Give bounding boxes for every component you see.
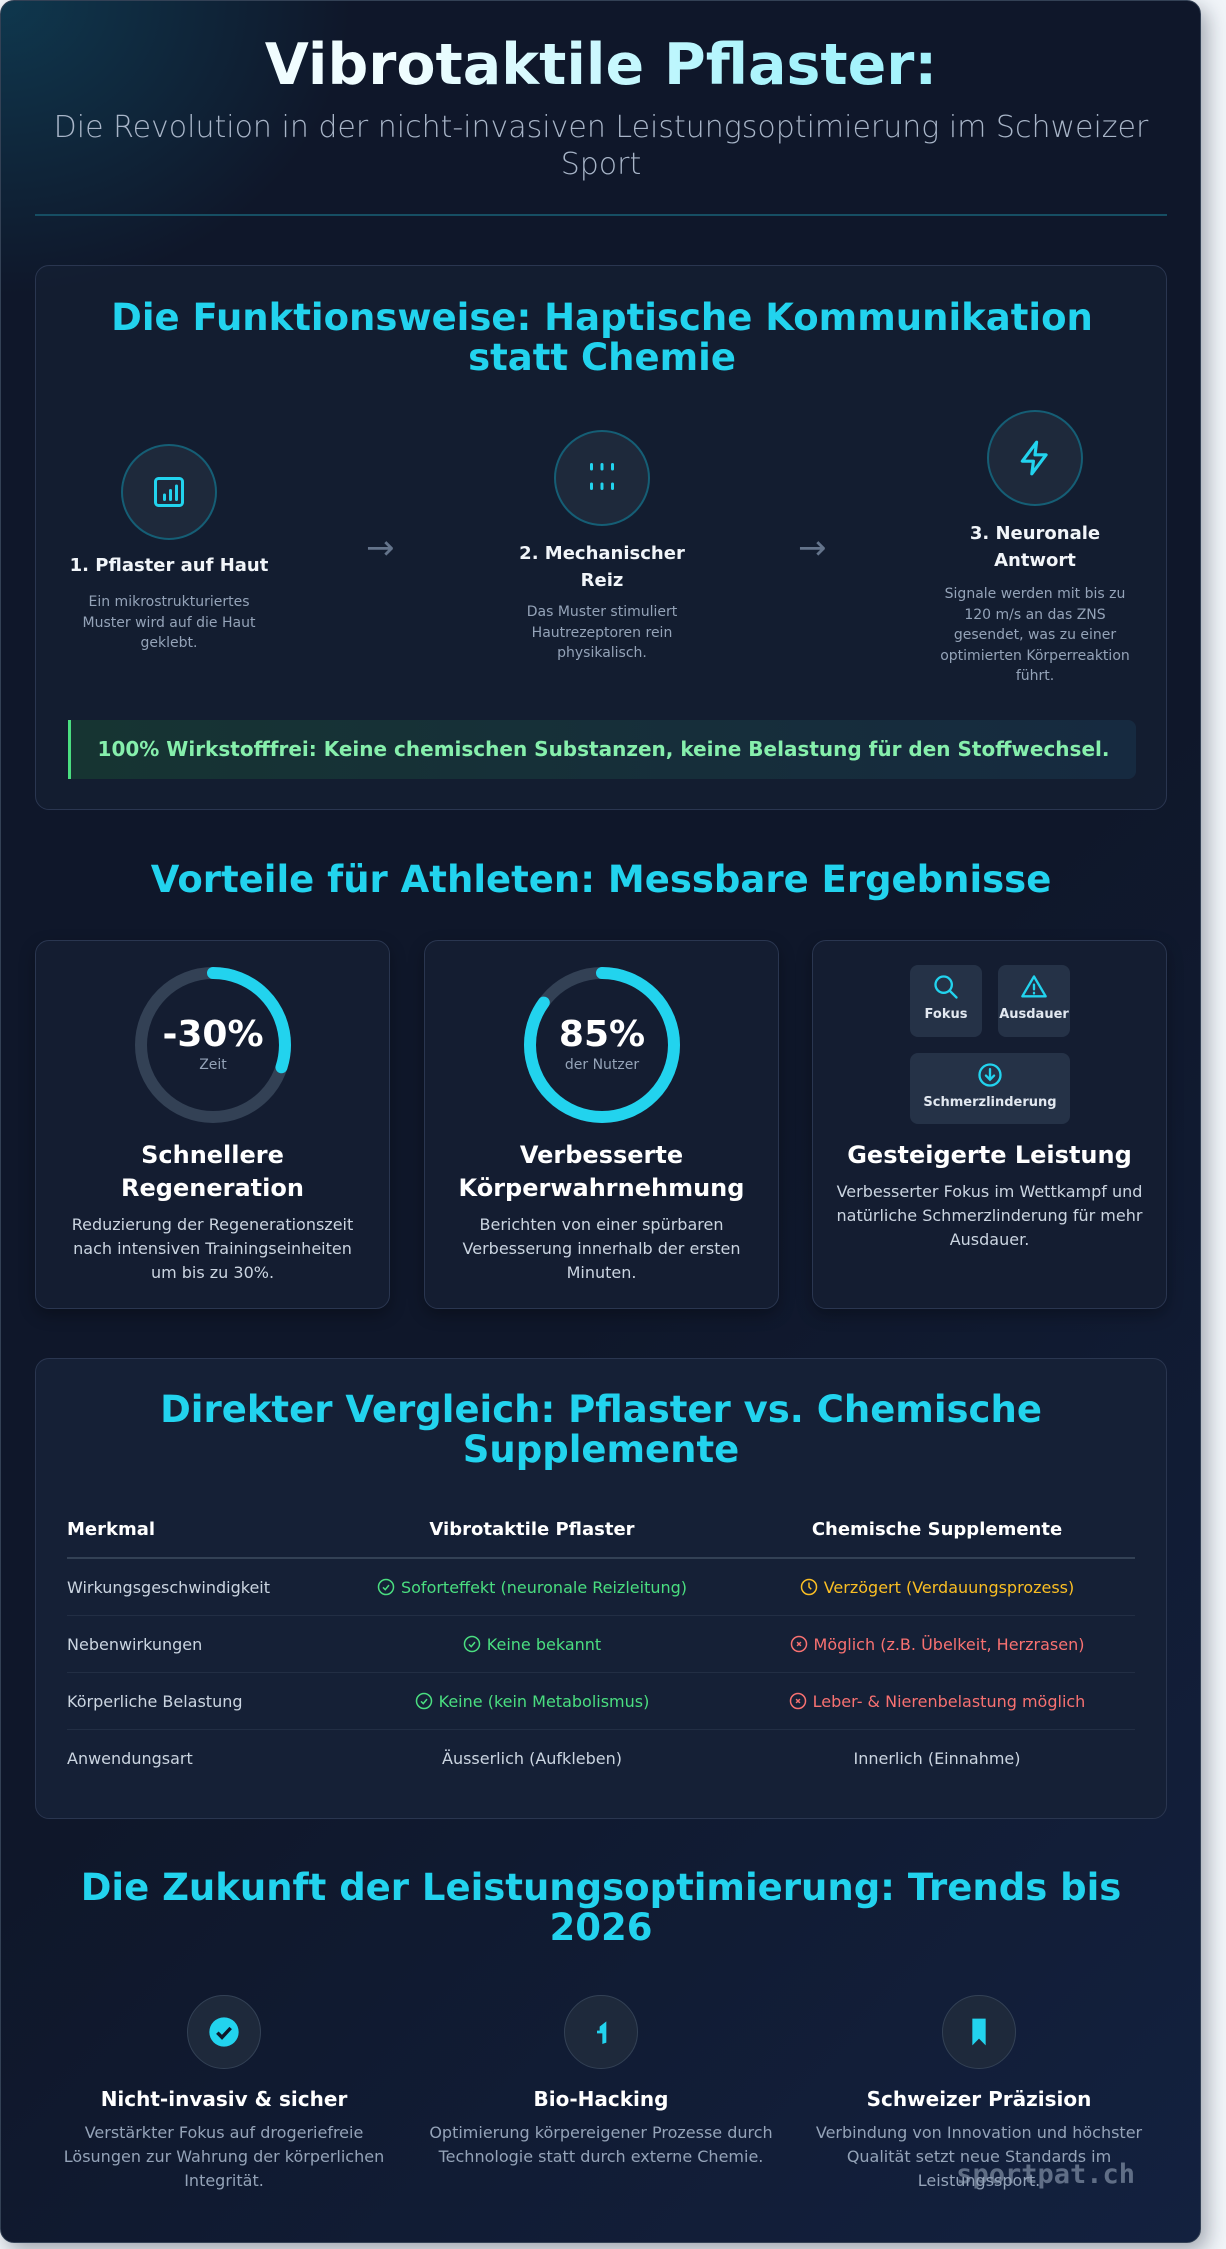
panel: Vergleich (35, 1358, 1167, 1819)
panel: Körperwahrnehmung: Körperwahrnehmung (459, 1174, 744, 1202)
trend: Nicht-invasiv: Nicht-invasiv & sicher (101, 2087, 347, 2111)
callout: wirkstofffrei: 100% Wirkstofffrei: Keine chemischen Substanzen, keine Belastung für den Stoffwechsel. (98, 737, 1109, 761)
chart: ring -30% (135, 967, 291, 1123)
panel: Regeneration: Regeneration (121, 1174, 304, 1202)
trend: Bio-Hacking (429, 1995, 773, 2166)
step 3: Antwort (994, 550, 1076, 571)
panel: Regeneration: Schnellere (141, 1141, 284, 1169)
chart: ring 85%: 85% (559, 1014, 645, 1055)
subtitle: Die Revolution in der nicht-invasiven Leistungsoptimierung im Schweizer Sport (54, 110, 1148, 182)
step 2: Das Muster stimuliert Hautrezeptoren rein physikalisch. (527, 604, 677, 661)
panel: Körperwahrnehmung: Verbesserte (520, 1141, 683, 1169)
icon: Schmerzlinderung: Schmerzlinderung (923, 1095, 1057, 1110)
table: comparison: Soforteffekt (neuronale Reizleitung) (401, 1578, 687, 1597)
panel: Körperwahrnehmung: Berichten von einer spürbaren Verbesserung innerhalb der ersten Minuten. (463, 1215, 740, 1282)
step 1 (70, 444, 268, 651)
chart: ring -30%: Zeit (199, 1057, 227, 1073)
panel: Funktionsweise (35, 265, 1167, 810)
title: Vibrotaktile Pflaster: (265, 32, 937, 98)
trend: Nicht-invasiv: Verstärkter Fokus auf drogeriefreie Lösungen zur Wahrung der körperlichen Integrität. (64, 2123, 384, 2190)
table: comparison: Äusserlich (Aufkleben) (442, 1749, 622, 1768)
table: comparison: Vibrotaktile Pflaster (429, 1519, 635, 1540)
arrow: → (366, 528, 394, 568)
icon: check (187, 1995, 261, 2069)
table: comparison: Chemische Supplemente (812, 1519, 1062, 1540)
icon: bookmark (942, 1995, 1016, 2069)
icon: Fokus: Fokus (925, 1007, 967, 1022)
step 2: Reiz (581, 570, 623, 591)
table: comparison (67, 1519, 1135, 1768)
icon: Ausdauer (998, 965, 1070, 1037)
table: comparison: Nebenwirkungen (67, 1635, 202, 1654)
step 1: 1. Pflaster auf Haut (70, 555, 268, 576)
heading: Funktionsweise: Die Funktionsweise: Haptische Kommunikation statt Chemie (111, 296, 1093, 379)
icon: Fokus (910, 965, 982, 1037)
trend: Schweizer Präzision (816, 1995, 1142, 2190)
step 2: 2. Mechanischer (519, 543, 685, 564)
table: comparison: Möglich (z.B. Übelkeit, Herzrasen) (814, 1635, 1084, 1654)
table: comparison: Keine (kein Metabolismus) (439, 1692, 649, 1711)
arrow: → (798, 528, 826, 568)
icon: bolt (987, 410, 1083, 506)
chart: ring -30%: -30% (162, 1014, 264, 1055)
heading: Zukunft: Die Zukunft der Leistungsoptimierung: Trends bis 2026 (81, 1866, 1121, 1949)
chart: ring 85%: der Nutzer (565, 1057, 639, 1073)
watermark: sportpat.ch (956, 2159, 1135, 2190)
step 3: Signale werden mit bis zu 120 m/s an das ZNS gesendet, was zu einer optimierten Körperreaktion führt. (940, 586, 1130, 684)
trend: Schweizer Präzision: Verbindung von Innovation und höchster Qualität setzt neue Standards im Leistungssport. (816, 2123, 1142, 2190)
heading: Vergleich: Direkter Vergleich: Pflaster vs. Chemische Supplemente (160, 1388, 1042, 1471)
chart: ring 85% (524, 967, 680, 1123)
panel: Körperwahrnehmung (424, 940, 779, 1309)
panel: Leistung: Verbesserter Fokus im Wettkampf und natürliche Schmerzlinderung für mehr Ausdauer. (837, 1182, 1142, 1249)
step 3 (940, 410, 1130, 684)
table: comparison: Keine bekannt (487, 1635, 601, 1654)
step 3: 3. Neuronale (970, 523, 1100, 544)
panel: Leistung (812, 940, 1167, 1309)
step 1: Ein mikrostrukturiertes Muster wird auf die Haut geklebt. (83, 594, 255, 651)
table: comparison: Anwendungsart (67, 1749, 193, 1768)
icon: pattern (554, 430, 650, 526)
panel: Regeneration (35, 940, 390, 1309)
step 2 (519, 430, 685, 661)
trend: Bio-Hacking: Optimierung körpereigener Prozesse durch Technologie statt durch externe Chemie. (429, 2123, 773, 2166)
trend: Nicht-invasiv (64, 1995, 384, 2190)
trend: Bio-Hacking: Bio-Hacking (534, 2087, 668, 2111)
panel: Regeneration: Reduzierung der Regenerationszeit nach intensiven Trainingseinheiten um bis zu 30%. (72, 1215, 353, 1282)
table: comparison: Wirkungsgeschwindigkeit (67, 1578, 270, 1597)
table: comparison: Körperliche Belastung (67, 1692, 243, 1711)
icon: chart (121, 444, 217, 540)
table: comparison: Verzögert (Verdauungsprozess) (824, 1578, 1074, 1597)
heading: Vorteile: Vorteile für Athleten: Messbare Ergebnisse (151, 858, 1051, 901)
icon: Schmerzlinderung (910, 1053, 1070, 1124)
trend: Schweizer Präzision: Schweizer Präzision (867, 2087, 1091, 2111)
callout: wirkstofffrei (68, 720, 1136, 779)
table: comparison: Leber- & Nierenbelastung möglich (813, 1692, 1085, 1711)
icon: plug (564, 1995, 638, 2069)
panel: Leistung: Gesteigerte Leistung (847, 1141, 1132, 1169)
table: comparison: Innerlich (Einnahme) (853, 1749, 1021, 1768)
icon: Ausdauer: Ausdauer (999, 1007, 1069, 1022)
table: comparison: Merkmal (67, 1519, 155, 1540)
